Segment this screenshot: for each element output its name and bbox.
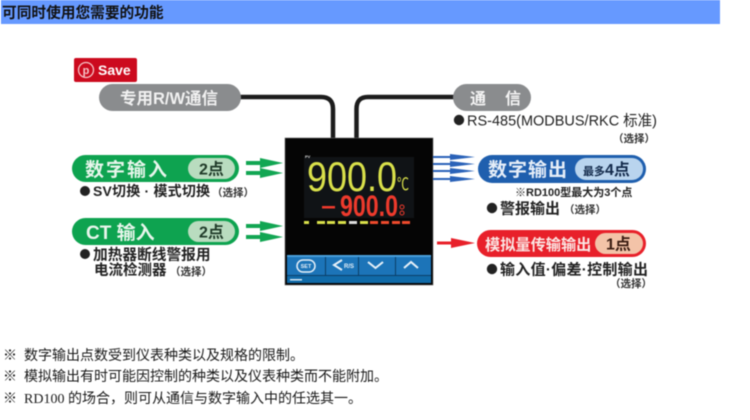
text: input deviation control output: （选择）	[610, 277, 652, 290]
display panel: 900.0	[340, 190, 398, 223]
footnotes	[3, 348, 388, 407]
pill: communication: 信	[505, 90, 521, 108]
footnotes: 模拟输出有时可能因控制的种类以及仪表种类而不能附加。	[24, 369, 388, 385]
text: CT detector: 电流检测器	[94, 261, 167, 279]
connector: communication to controller	[356, 97, 454, 138]
text: input deviation control output	[487, 260, 652, 290]
text: SV switch	[80, 183, 254, 199]
text: alarm output: （选择）	[564, 203, 606, 216]
text: alarm output	[487, 200, 606, 218]
pill: analog output	[477, 230, 646, 257]
button strip	[287, 255, 431, 283]
display panel: ℃	[397, 175, 409, 194]
heading bar: 可同时使用您需要的功能	[2, 4, 164, 22]
footnotes: ※	[3, 370, 17, 385]
text: alarm output: 警报输出	[500, 200, 560, 218]
indicator row	[304, 221, 410, 224]
arrows: digital input	[246, 158, 283, 178]
text: CT detector	[80, 246, 212, 279]
arrow: analog output	[437, 238, 475, 248]
pill: digital output: 数字输出	[488, 158, 568, 181]
pill: digital output	[478, 155, 646, 183]
pill: R/W communication	[99, 84, 241, 111]
save button	[74, 58, 137, 82]
text: SV switch: （选择）	[212, 186, 254, 199]
pill: communication: 通	[470, 90, 486, 108]
text: RS-485	[454, 112, 657, 145]
text: RS-485: RS-485(MODBUS/RKC 标准)	[467, 112, 657, 130]
pill: CT input: CT 输入	[86, 221, 155, 244]
note: RD100: ※RD100型最大为3个点	[515, 185, 632, 199]
pill: analog output: 模拟量传输输出	[485, 236, 591, 254]
connector: R/W to controller	[240, 97, 333, 138]
display panel: PV	[305, 154, 311, 159]
save button: Save	[98, 62, 131, 78]
text: CT detector: 加热器断线警报用	[93, 246, 211, 264]
pill: digital input: 数字输入	[85, 158, 169, 181]
footnotes: ※	[3, 349, 17, 364]
text: input deviation control output: 输入值·偏差·控制输出	[500, 260, 648, 278]
button strip: R/S	[344, 264, 354, 270]
footnotes: 数字输出点数受到仪表种类以及规格的限制。	[24, 348, 304, 364]
arrows: digital output	[433, 154, 475, 182]
pill: CT input	[72, 218, 239, 245]
pill: CT input: 2点	[199, 222, 224, 242]
pill: digital output: 最多4点	[583, 160, 630, 179]
button strip: SET	[301, 264, 312, 270]
display panel: 900.0	[307, 153, 397, 200]
pill: digital input	[72, 155, 239, 182]
save button: p	[83, 65, 90, 77]
footnotes: RD100 的场合，则可从通信与数字输入中的任选其一。	[24, 391, 362, 407]
text: SV switch: SV切换 · 模式切换	[93, 183, 210, 199]
pill: communication	[453, 84, 531, 111]
arrows: CT input	[246, 221, 283, 242]
footnotes: ※	[3, 392, 17, 407]
text: RS-485: （选择）	[613, 132, 655, 145]
display panel	[304, 153, 414, 223]
pill: R/W communication: 专用R/W通信	[120, 89, 218, 108]
pill: digital input: 2点	[199, 160, 224, 178]
pill: analog output: 1点	[606, 234, 631, 254]
controller device	[285, 138, 433, 285]
heading bar	[1, 0, 720, 24]
text: CT detector: （选择）	[170, 265, 212, 278]
